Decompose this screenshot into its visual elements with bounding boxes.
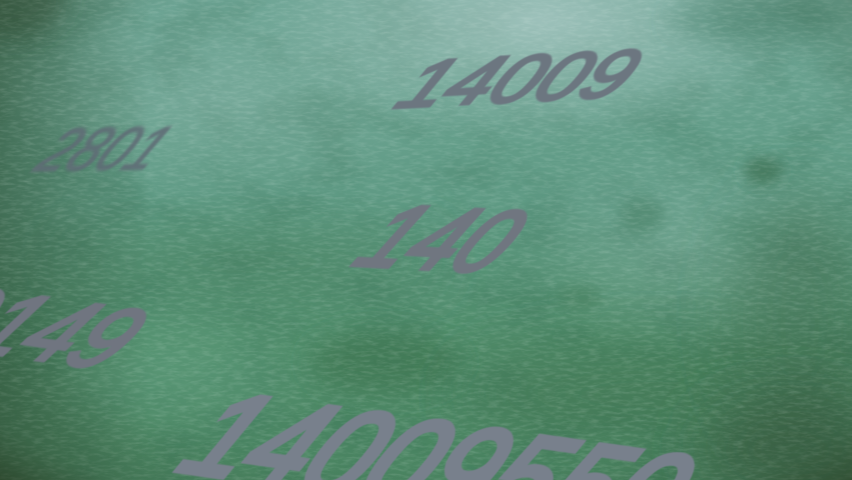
number: 140: 140 — [337, 187, 545, 291]
number: 14009: 14009 — [383, 35, 656, 122]
number: 2801: 2801 — [22, 114, 187, 184]
